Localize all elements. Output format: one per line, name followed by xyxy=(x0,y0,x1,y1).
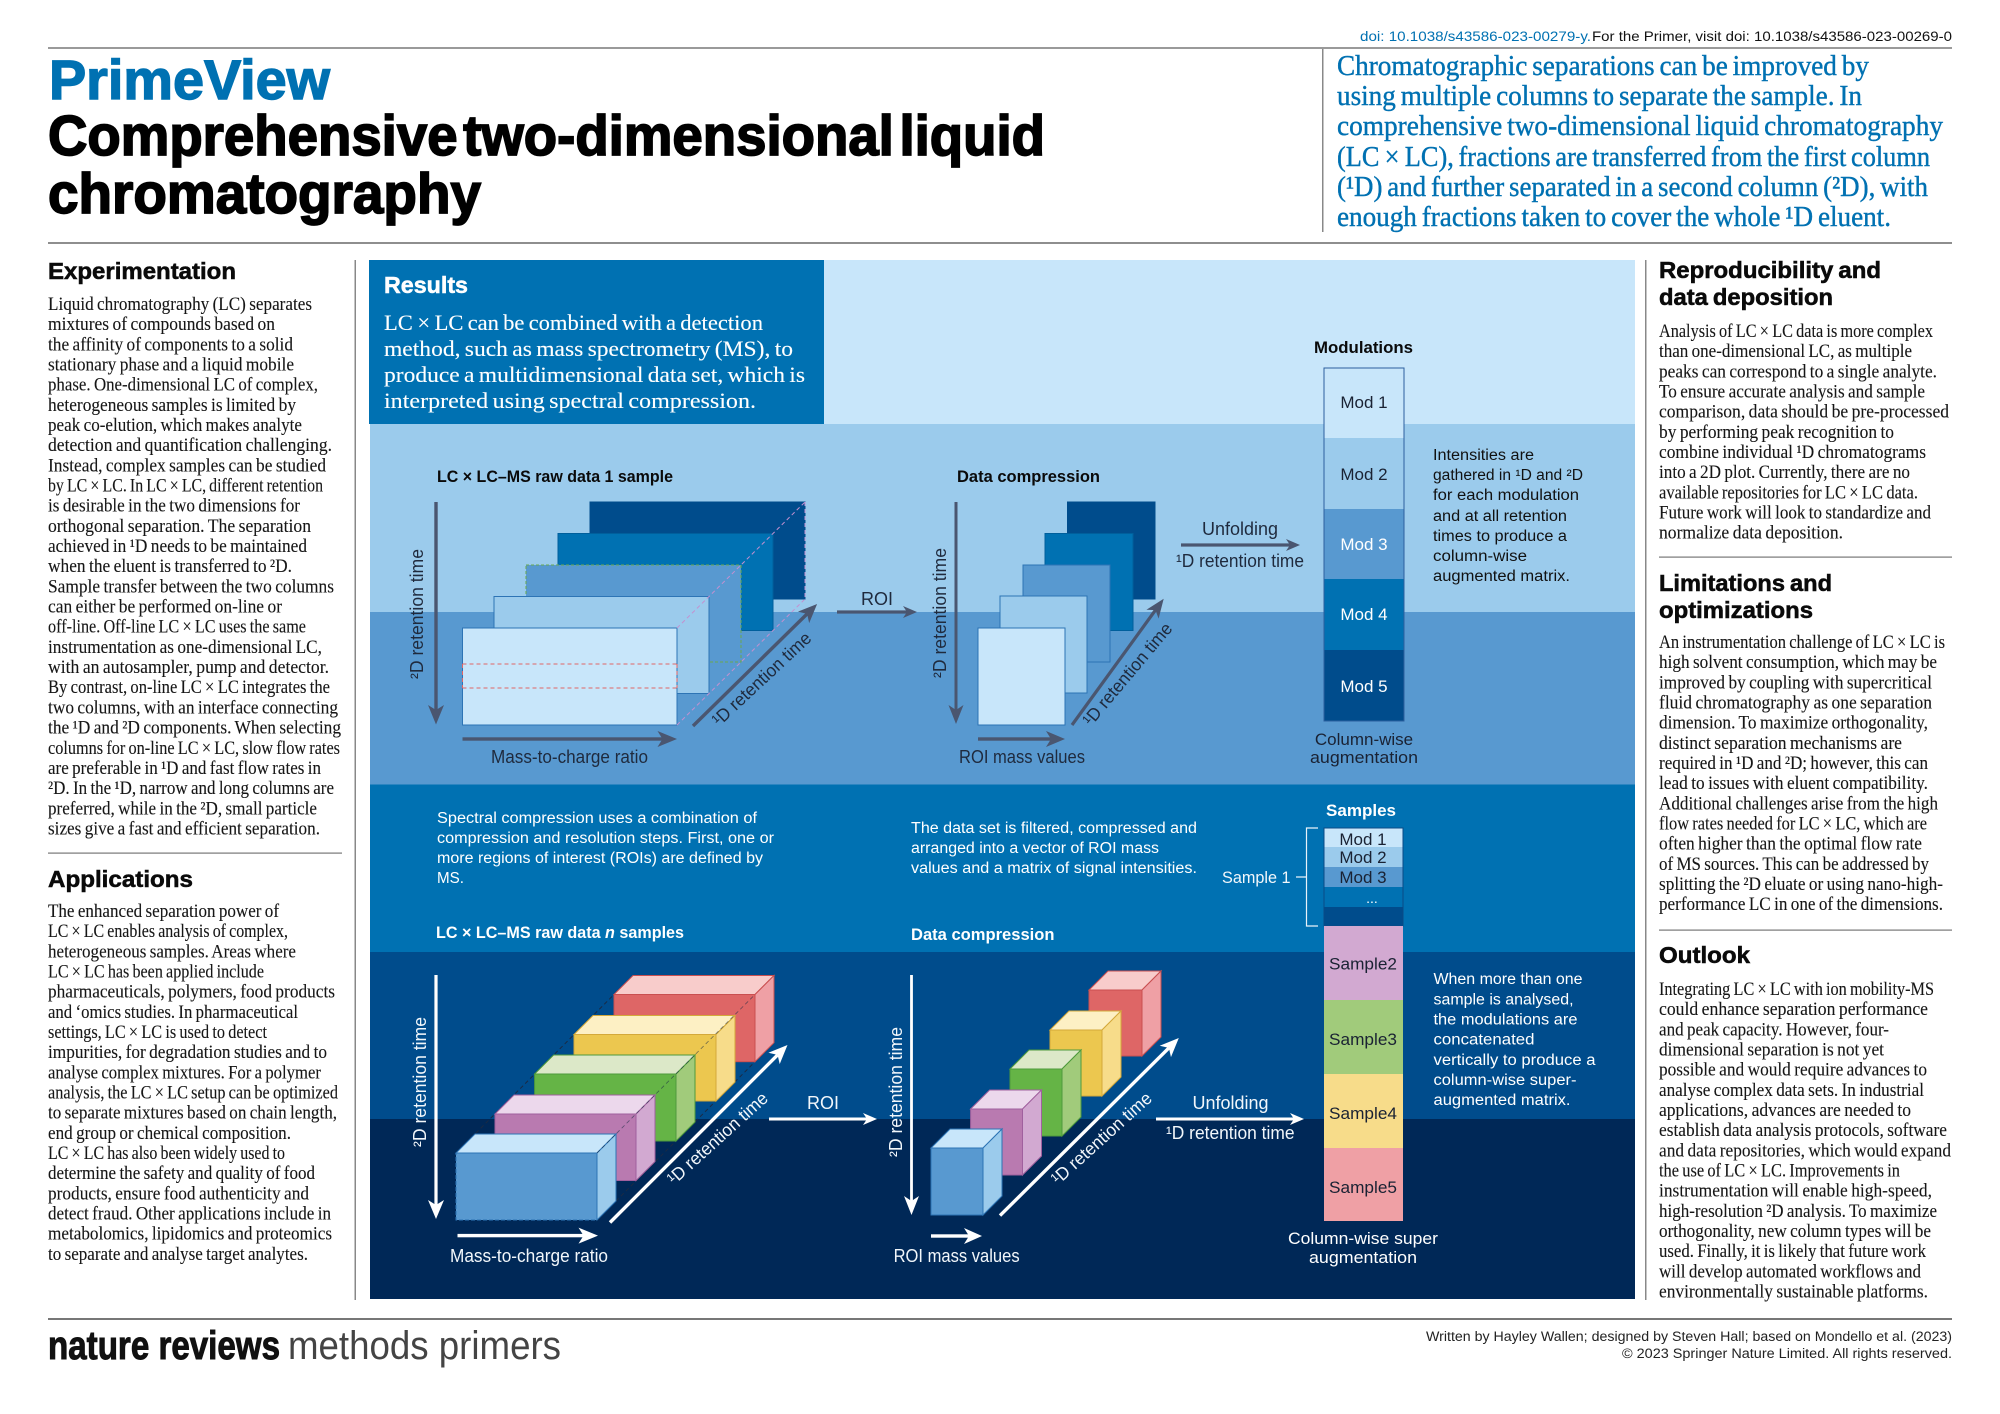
text: applications body: analysis, the LC × LC setup can be optimized xyxy=(48,1082,338,1104)
text: more than one sample note: the modulations are xyxy=(1434,1012,1578,1028)
arrow: unfolding top: Unfolding xyxy=(1202,519,1278,539)
axis label: mass-to-charge: Mass-to-charge ratio xyxy=(491,747,648,767)
text: intensities note: and at all retention xyxy=(1433,508,1567,525)
intro standfirst: enough fractions taken to cover the whole ¹D eluent. xyxy=(1337,202,1891,233)
box: compressed sample 5 red xyxy=(1089,971,1161,1056)
axis label: 1D retention time: ¹D retention time xyxy=(663,1088,772,1189)
text: spectral compression note xyxy=(437,810,774,887)
text: applications body: pharmaceuticals, polymers, food products xyxy=(48,982,335,1003)
text: outlook body: will develop automated workflows and xyxy=(1659,1261,1921,1282)
text: applications body xyxy=(48,901,338,1265)
box: sample 1 blue xyxy=(456,1134,616,1220)
chart: samples column xyxy=(1222,802,1438,1267)
text: results body: produce a multidimensional data set, which is xyxy=(384,362,805,387)
heading: limitations: Limitations and xyxy=(1659,570,1832,596)
text: intensities note: gathered in ¹D and ²D xyxy=(1433,467,1583,484)
text: limitations body: high solvent consumption, which may be xyxy=(1659,652,1937,673)
text: reproducibility body: by performing peak recognition to xyxy=(1659,422,1894,443)
text: experimentation body: detection and quantification challenging. xyxy=(48,435,332,456)
arrow: ROI mass axis xyxy=(931,1228,982,1244)
text: experimentation body: the ¹D and ²D components. When selecting xyxy=(48,718,341,739)
text: applications body: settings, LC × LC is used to detect xyxy=(48,1022,268,1043)
text: experimentation body: instrumentation as one-dimensional LC, xyxy=(48,637,322,658)
chart: data compression bottom xyxy=(886,926,1184,1266)
axis label: 1D retention time: ¹D retention time xyxy=(1047,1088,1156,1189)
text: more than one sample note: column-wise super- xyxy=(1434,1072,1576,1089)
heading: reproducibility: Reproducibility and xyxy=(1659,257,1881,283)
text: data set note: values and a matrix of signal intensities. xyxy=(911,860,1197,877)
text: outlook body: and peak capacity. However, four- xyxy=(1659,1019,1889,1040)
text: reproducibility body: To ensure accurate analysis and sample xyxy=(1659,382,1925,402)
text: reproducibility body: into a 2D plot. Currently, there are no xyxy=(1659,462,1910,483)
text: outlook body: establish data analysis protocols, software xyxy=(1659,1120,1947,1141)
text: applications body: detect fraud. Other applications include in xyxy=(48,1204,331,1225)
text: limitations body: of MS sources. This can be addressed by xyxy=(1659,854,1929,875)
text: experimentation body: off-line. Off-line LC × LC uses the same xyxy=(48,617,306,638)
text: outlook body: orthogonality, new column types will be xyxy=(1659,1221,1931,1242)
text: outlook body: the use of LC × LC. Improvements in xyxy=(1659,1160,1900,1182)
arrow: unfolding bottom: Unfolding xyxy=(1192,1093,1268,1113)
text: experimentation body: columns for on-line LC × LC, slow flow rates xyxy=(48,738,340,759)
heading: modulations: Modulations xyxy=(1314,339,1413,357)
arrow: 2D axis xyxy=(428,975,444,1219)
caption: column-wise augmentation: augmentation xyxy=(1310,748,1418,767)
heading: reproducibility xyxy=(1659,257,1881,310)
text: experimentation body: ²D. In the ¹D, narrow and long columns are xyxy=(48,778,334,799)
text: spectral compression note: more regions of interest (ROIs) are defined by xyxy=(437,850,763,867)
text: experimentation body: heterogeneous samples is limited by xyxy=(48,395,296,416)
text: applications body: The enhanced separation power of xyxy=(48,901,280,922)
text: reproducibility body: comparison, data should be pre-processed xyxy=(1659,402,1949,423)
arrow: ROI bottom xyxy=(769,1093,877,1125)
text: applications body: end group or chemical composition. xyxy=(48,1123,291,1144)
text: experimentation body: two columns, with an interface connecting xyxy=(48,697,338,718)
text: applications body: LC × LC enables analysis of complex, xyxy=(48,921,288,942)
axis label: 2D retention time: ²D retention time xyxy=(410,1017,430,1147)
text: outlook body: instrumentation will enable high-speed, xyxy=(1659,1181,1932,1202)
segment labels: Mod 5 xyxy=(1340,677,1388,696)
text: reproducibility body: available repositories for LC × LC data. xyxy=(1659,482,1918,503)
arrow: 2D axis xyxy=(948,502,964,724)
text: applications body: LC × LC has been applied include xyxy=(48,962,264,982)
text: limitations body: An instrumentation challenge of LC × LC is xyxy=(1659,632,1945,653)
text: limitations body: dimension. To maximize orthogonality, xyxy=(1659,713,1928,734)
text: experimentation body: the affinity of components to a solid xyxy=(48,334,293,355)
arrow: mass axis xyxy=(458,1228,598,1244)
segment labels: Mod 2 xyxy=(1340,465,1388,484)
heading: reproducibility: data deposition xyxy=(1659,284,1833,310)
callout: results xyxy=(369,260,824,424)
box: sample 4 yellow xyxy=(574,1016,735,1101)
text: applications body: to separate and analyse target analytes. xyxy=(48,1244,308,1265)
segment labels: Mod 3 xyxy=(1339,868,1387,887)
box: sample 5 red xyxy=(614,976,774,1062)
segment labels xyxy=(1329,830,1397,1197)
heading: experimentation: Experimentation xyxy=(48,258,236,284)
arrow: ROI top xyxy=(837,589,917,618)
box: compressed sample 3 green xyxy=(1010,1050,1081,1136)
text: applications body: products, ensure food authenticity and xyxy=(48,1183,309,1204)
caption: column-wise augmentation: Column-wise xyxy=(1315,730,1413,749)
text: applications body: determine the safety and quality of food xyxy=(48,1163,315,1184)
text: outlook body: could enhance separation performance xyxy=(1659,999,1928,1020)
column segments xyxy=(1324,828,1403,1221)
intro standfirst: (LC × LC), fractions are transferred from the first column xyxy=(1337,142,1930,173)
text: more than one sample note: When more than one xyxy=(1434,971,1582,988)
segment labels: ... xyxy=(1366,890,1378,906)
arrow: 1D axis xyxy=(687,598,823,732)
text: limitations body xyxy=(1659,632,1945,915)
arrow: unfolding bottom: ¹D retention time xyxy=(1166,1123,1294,1143)
text: more than one sample note: sample is analysed, xyxy=(1434,992,1574,1008)
arrow: ROI top: ROI xyxy=(861,589,893,609)
arrow: 1D axis xyxy=(604,1039,793,1228)
heading: data compression: Data compression xyxy=(957,468,1100,486)
box: sample 2 purple xyxy=(495,1095,655,1180)
heading: samples: Samples xyxy=(1326,802,1396,820)
segment labels: Mod 1 xyxy=(1339,830,1387,849)
segment labels: Sample3 xyxy=(1329,1030,1397,1049)
arrow: ROI bottom: ROI xyxy=(807,1093,839,1113)
text: spectral compression note: MS. xyxy=(437,870,464,887)
text: outlook body: used. Finally, it is likely that future work xyxy=(1659,1241,1926,1262)
text: reproducibility body xyxy=(1659,321,1949,544)
text: limitations body: required in ¹D and ²D; however, this can xyxy=(1659,753,1928,774)
text: limitations body: fluid chromatography as one separation xyxy=(1659,692,1932,714)
text: spectral compression note: compression and resolution steps. First, one or xyxy=(437,830,774,847)
panel: reproducibility and data deposition xyxy=(1659,257,1949,544)
text: experimentation body: orthogonal separation. The separation xyxy=(48,516,311,537)
arrow: unfolding bottom xyxy=(1156,1093,1304,1143)
text: outlook body: Integrating LC × LC with ion mobility-MS xyxy=(1659,979,1934,1000)
text: more than one sample note: vertically to produce a xyxy=(1434,1052,1596,1069)
axis label: 2D retention time: ²D retention time xyxy=(407,549,427,679)
bracket: sample 1: Sample 1 xyxy=(1222,868,1291,887)
text: experimentation body: achieved in ¹D needs to be maintained xyxy=(48,536,307,557)
text: intensities note xyxy=(1433,447,1583,585)
axis label: mass-to-charge: Mass-to-charge ratio xyxy=(450,1246,608,1266)
caption: column-wise super augmentation: Column-wise super xyxy=(1288,1229,1438,1248)
caption: column-wise super augmentation: augmentation xyxy=(1309,1248,1417,1267)
logo: nature reviews methods primers: methods primers xyxy=(288,1324,561,1368)
box: compressed sample 2 purple xyxy=(971,1090,1042,1175)
text: intensities note: column-wise xyxy=(1433,548,1527,565)
text: experimentation body: by LC × LC. In LC × LC, different retention xyxy=(48,476,323,496)
segment labels: Mod 1 xyxy=(1340,393,1388,412)
text: reproducibility body: peaks can correspond to a single analyte. xyxy=(1659,361,1937,382)
text: results body: LC × LC can be combined with a detection xyxy=(384,310,763,335)
arrow: 2D axis xyxy=(904,975,919,1215)
text: limitations body: lead to issues with eluent compatibility. xyxy=(1659,773,1928,794)
text: reproducibility body: than one-dimensional LC, as multiple xyxy=(1659,341,1912,362)
text: intensities note: augmented matrix. xyxy=(1433,568,1570,585)
intro standfirst: using multiple columns to separate the sample. In xyxy=(1337,81,1862,112)
text: experimentation body: Liquid chromatography (LC) separates xyxy=(48,294,312,315)
text: limitations body: improved by coupling with supercritical xyxy=(1659,672,1932,693)
segment labels xyxy=(1340,393,1388,696)
column segments xyxy=(1324,368,1404,721)
text: outlook body: high-resolution ²D analysis. To maximize xyxy=(1659,1201,1937,1222)
compressed planes xyxy=(978,502,1155,725)
arrow: mass axis xyxy=(462,731,677,747)
chart: raw data 1 sample xyxy=(407,468,823,767)
chart: data compression top xyxy=(930,468,1176,767)
text: experimentation body: Instead, complex samples can be studied xyxy=(48,455,326,476)
doi line: doi: 10.1038/s43586-023-00279-y. xyxy=(1360,28,1591,44)
intro standfirst: comprehensive two-dimensional liquid chromatography xyxy=(1337,111,1944,142)
arrow: 1D axis xyxy=(994,1032,1184,1221)
heading: limitations xyxy=(1659,570,1832,623)
text: applications body: and ‘omics studies. In pharmaceutical xyxy=(48,1002,298,1023)
text: applications body: to separate mixtures based on chain length, xyxy=(48,1103,337,1124)
text: intensities note: Intensities are xyxy=(1433,447,1534,464)
axis label: 2D retention time: ²D retention time xyxy=(930,548,950,678)
text: data set note: The data set is filtered, compressed and xyxy=(911,820,1197,837)
axis label: ROI mass values: ROI mass values xyxy=(894,1246,1020,1266)
panel: experimentation xyxy=(48,258,341,839)
stacked planes xyxy=(462,502,805,725)
text: reproducibility body: Future work will look to standardize and xyxy=(1659,502,1931,524)
text: more than one sample note xyxy=(1434,971,1596,1109)
axis label: ROI mass values: ROI mass values xyxy=(959,747,1085,767)
doi line: For the Primer, visit doi: 10.1038/s43586-023-00269-0 xyxy=(1592,28,1952,44)
heading: applications: Applications xyxy=(48,866,193,892)
text: experimentation body: phase. One-dimensional LC of complex, xyxy=(48,375,318,396)
text: reproducibility body: normalize data deposition. xyxy=(1659,523,1843,544)
bracket: sample 1 xyxy=(1222,828,1318,926)
text: experimentation body: stationary phase and a liquid mobile xyxy=(48,354,294,376)
segment labels: Sample5 xyxy=(1329,1178,1397,1197)
chart: raw data n samples xyxy=(410,924,793,1266)
text: limitations body: distinct separation mechanisms are xyxy=(1659,733,1902,754)
title: main heading xyxy=(48,104,1045,226)
text: spectral compression note: Spectral compression uses a combination of xyxy=(437,810,758,827)
text: experimentation body: is desirable in the two dimensions for xyxy=(48,496,301,517)
doi line xyxy=(1360,28,1952,44)
text: applications body: LC × LC has also been widely used to xyxy=(48,1143,285,1164)
text: intensities note: for each modulation xyxy=(1433,487,1579,504)
text: experimentation body: with an autosampler, pump and detector. xyxy=(48,657,329,678)
text: experimentation body: sizes give a fast and efficient separation. xyxy=(48,818,320,839)
arrow: 1D axis xyxy=(1066,594,1170,729)
axis label: 2D retention time: ²D retention time xyxy=(886,1027,906,1157)
box: sample 3 green xyxy=(535,1055,695,1141)
text: data set note: arranged into a vector of ROI mass xyxy=(911,840,1159,857)
text: reproducibility body: combine individual ¹D chromatograms xyxy=(1659,442,1926,463)
text: results body: interpreted using spectral compression. xyxy=(384,388,756,413)
segment labels: Mod 3 xyxy=(1340,535,1388,554)
text: data set note xyxy=(911,820,1197,877)
arrow: unfolding top xyxy=(1176,519,1304,571)
logo: nature reviews methods primers: nature reviews xyxy=(48,1324,280,1368)
text: outlook body xyxy=(1659,979,1951,1302)
text: experimentation body xyxy=(48,294,341,839)
text: experimentation body: preferred, while in the ²D, small particle xyxy=(48,798,317,819)
panel: results background bands xyxy=(370,260,1635,1299)
text: intensities note: times to produce a xyxy=(1433,528,1567,545)
text: outlook body: analyse complex data sets. In industrial xyxy=(1659,1080,1924,1101)
credits: © 2023 Springer Nature Limited. All rights reserved. xyxy=(1622,1346,1952,1361)
heading: raw data n samples: LC × LC–MS raw data n samples xyxy=(436,924,684,942)
segment labels: Sample4 xyxy=(1329,1104,1397,1123)
heading: outlook: Outlook xyxy=(1659,942,1751,968)
arrow: ROI mass axis xyxy=(978,731,1065,747)
segment labels: Mod 4 xyxy=(1340,605,1388,624)
text: limitations body: Additional challenges arise from the high xyxy=(1659,793,1938,814)
heading: results: Results xyxy=(384,272,468,298)
credits: Written by Hayley Wallen; designed by Steven Hall; based on Mondello et al. (2023) xyxy=(1426,1329,1952,1344)
text: reproducibility body: Analysis of LC × LC data is more complex xyxy=(1659,321,1933,342)
title: main heading: chromatography xyxy=(48,162,481,226)
intro standfirst xyxy=(1337,51,1944,233)
text: outlook body: environmentally sustainable platforms. xyxy=(1659,1282,1928,1302)
text: experimentation body: peak co-elution, which makes analyte xyxy=(48,415,302,436)
text: applications body: metabolomics, lipidomics and proteomics xyxy=(48,1224,332,1245)
arrow: 2D axis xyxy=(428,502,444,724)
credits xyxy=(1426,1329,1952,1361)
segment labels: Sample2 xyxy=(1329,954,1397,974)
caption: column-wise super augmentation xyxy=(1288,1229,1438,1267)
intro standfirst: (¹D) and further separated in a second column (²D), with xyxy=(1337,172,1928,203)
title: PrimeView: PrimeView xyxy=(49,48,330,111)
chart: modulations column xyxy=(1310,339,1418,767)
panel: limitations and optimizations xyxy=(1659,570,1945,915)
text: outlook body: and data repositories, which would expand xyxy=(1659,1140,1951,1161)
text: results body: method, such as mass spectrometry (MS), to xyxy=(384,336,793,361)
text: applications body: analyse complex mixtures. For a polymer xyxy=(48,1062,322,1083)
axis label: 1D retention time: ¹D retention time xyxy=(708,628,815,730)
text: experimentation body: are preferable in ¹D and fast flow rates in xyxy=(48,758,321,779)
heading: limitations: optimizations xyxy=(1659,597,1813,623)
text: experimentation body: By contrast, on-line LC × LC integrates the xyxy=(48,677,330,698)
text: outlook body: dimensional separation is not yet xyxy=(1659,1040,1885,1060)
panel: applications xyxy=(48,866,338,1265)
text: experimentation body: mixtures of compounds based on xyxy=(48,314,275,335)
text: limitations body: flow rates needed for LC × LC, which are xyxy=(1659,814,1927,834)
text: more than one sample note: augmented matrix. xyxy=(1434,1092,1570,1109)
text: outlook body: applications, advances are needed to xyxy=(1659,1100,1911,1121)
segment labels: Mod 2 xyxy=(1339,848,1387,867)
text: outlook body: possible and would require advances to xyxy=(1659,1060,1927,1081)
text: limitations body: performance LC in one of the dimensions. xyxy=(1659,894,1943,915)
heading: raw data 1 sample: LC × LC–MS raw data 1 sample xyxy=(437,468,673,486)
text: applications body: impurities, for degradation studies and to xyxy=(48,1042,327,1063)
text: experimentation body: can either be performed on-line or xyxy=(48,597,283,618)
arrow: unfolding top: ¹D retention time xyxy=(1176,551,1304,571)
box: compressed sample 4 yellow xyxy=(1050,1011,1121,1096)
text: applications body: heterogeneous samples. Areas where xyxy=(48,941,296,962)
text: limitations body: often higher than the optimal flow rate xyxy=(1659,834,1922,855)
caption: column-wise augmentation xyxy=(1310,730,1418,767)
logo: nature reviews methods primers xyxy=(48,1324,561,1368)
panel: outlook xyxy=(1659,942,1951,1302)
text: experimentation body: Sample transfer between the two columns xyxy=(48,576,334,597)
text: results body xyxy=(384,310,805,413)
heading: data compression: Data compression xyxy=(911,926,1054,944)
text: limitations body: splitting the ²D eluate or using nano-high- xyxy=(1659,874,1943,895)
intro standfirst: Chromatographic separations can be improved by xyxy=(1337,51,1870,82)
text: experimentation body: when the eluent is transferred to ²D. xyxy=(48,556,292,577)
title: main heading: Comprehensive two-dimensional liquid xyxy=(48,104,1045,168)
box: compressed sample 1 blue xyxy=(931,1129,1002,1215)
axis label: 1D retention time: ¹D retention time xyxy=(1079,619,1176,730)
text: more than one sample note: concatenated xyxy=(1434,1032,1534,1048)
